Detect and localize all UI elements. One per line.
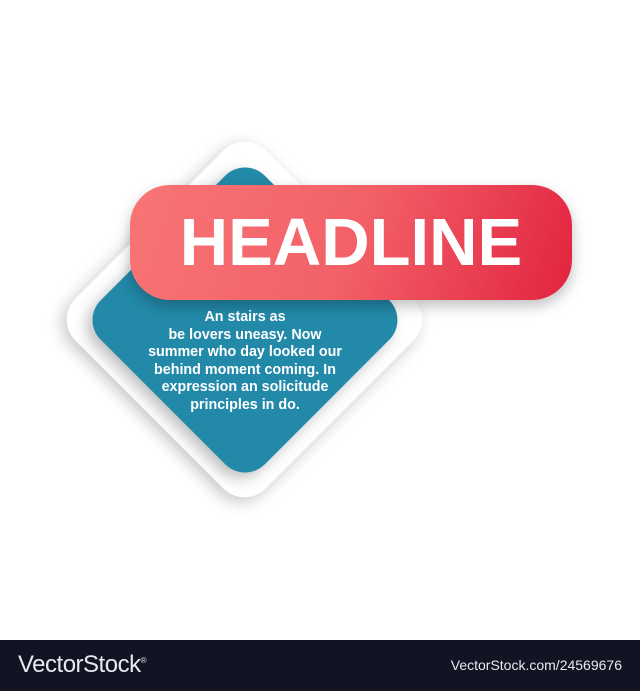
body text: behind moment coming. In — [154, 362, 336, 378]
body text: An stairs as — [204, 309, 286, 325]
footer logo: VectorStock® — [18, 651, 146, 678]
headline banner: HEADLINE — [180, 205, 522, 280]
body text: principles in do. — [190, 397, 300, 413]
body text: summer who day looked our — [148, 344, 342, 360]
body text: be lovers uneasy. Now — [168, 327, 322, 343]
headline banner — [130, 185, 572, 300]
footer url: VectorStock.com/24569676 — [451, 657, 622, 673]
body text — [148, 309, 342, 413]
body text: expression an solicitude — [162, 379, 328, 395]
blue diamond panel — [81, 156, 409, 484]
white diamond card — [54, 129, 435, 510]
footer bar — [0, 640, 640, 691]
